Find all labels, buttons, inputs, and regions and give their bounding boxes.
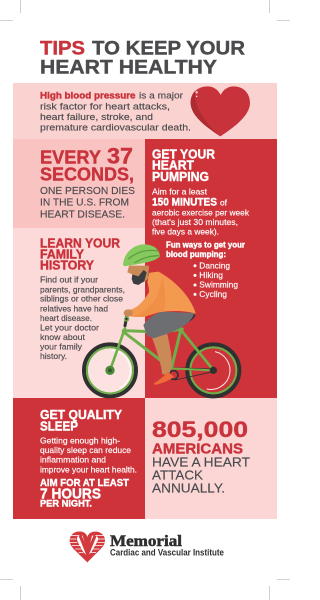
panel: get your heart pumping <box>145 139 277 398</box>
body text: inflammation and <box>40 454 106 464</box>
sleep goal <box>40 478 129 508</box>
sleep goal: 7 HOURS <box>40 486 101 502</box>
logo wordmark: Cardiac and Vascular Institute <box>110 548 224 558</box>
body text <box>40 275 125 361</box>
panel: every 37 seconds <box>13 139 145 228</box>
body text: (that's just 30 minutes, <box>152 217 238 227</box>
heading: PUMPING <box>152 170 209 184</box>
statistic text: ATTACK <box>152 467 203 482</box>
sleep goal: PER NIGHT. <box>40 498 92 508</box>
activity list: Hiking <box>199 270 223 280</box>
activity list: Dancing <box>199 260 230 270</box>
beard <box>132 270 147 285</box>
body text: history. <box>40 351 67 361</box>
panel: 805,000 americans <box>145 398 277 519</box>
statistic text: HAVE A HEART <box>152 455 250 470</box>
statistic text <box>152 417 250 496</box>
heading: HEART <box>152 159 194 173</box>
heading: GET YOUR <box>152 147 215 161</box>
title: HEART HEALTHY <box>40 56 217 78</box>
body text: Find out if your <box>40 275 98 285</box>
title: TO KEEP YOUR <box>92 38 245 60</box>
body text <box>40 436 137 474</box>
statistic text: AMERICANS <box>152 441 243 457</box>
intro text: is a major <box>139 91 183 101</box>
activity list: Swimming <box>199 280 238 290</box>
body text: relatives have had <box>40 303 108 313</box>
heading: SLEEP <box>40 419 78 433</box>
face <box>127 266 149 282</box>
statistic text: EVERY <box>40 147 101 167</box>
body text: five days a week). <box>152 227 219 237</box>
logo wordmark <box>110 533 224 558</box>
drivetrain <box>169 368 213 380</box>
intro text: risk factor for heart attacks, <box>40 101 170 111</box>
statistic text: 805,000 <box>152 417 248 442</box>
heading: GET QUALITY <box>40 408 123 422</box>
heading <box>40 408 123 433</box>
heading: LEARN YOUR <box>40 236 120 250</box>
hubs <box>105 366 217 375</box>
torso and arm <box>125 272 196 317</box>
body text: heart disease. <box>40 313 92 323</box>
helmet <box>123 244 160 266</box>
body text: of <box>220 198 228 208</box>
logo icon: striped heart <box>69 531 105 562</box>
heading <box>40 236 120 272</box>
body text: your family <box>40 341 83 351</box>
body text: 150 MINUTES <box>152 197 217 209</box>
intro text <box>40 91 191 132</box>
activity list <box>194 260 238 299</box>
saddle <box>178 312 196 326</box>
logo wordmark: Memorial <box>110 533 183 550</box>
fun ways heading <box>166 239 246 259</box>
body text: siblings or other close <box>40 294 123 304</box>
body text <box>152 186 250 237</box>
body text: Aim for a least <box>152 186 208 196</box>
body text: parents, grandparents, <box>40 284 125 294</box>
statistic text: 37 <box>107 143 133 168</box>
panel: high blood pressure <box>13 83 277 139</box>
body text: know about <box>40 332 86 342</box>
helmet stripes <box>128 250 159 263</box>
title: TIPS <box>40 38 85 60</box>
fun ways heading: Fun ways to get your <box>166 239 246 249</box>
title <box>40 38 245 78</box>
statistic text: ANNUALLY. <box>152 481 225 496</box>
panel: learn your family history <box>13 228 145 398</box>
hand <box>124 309 133 317</box>
fun ways heading: blood pumping: <box>166 249 226 259</box>
strap <box>143 268 149 288</box>
intro text: heart failure, stroke, and <box>40 112 153 122</box>
shoe <box>154 372 174 385</box>
heading <box>152 147 215 184</box>
body text: quality sleep can reduce <box>40 445 131 455</box>
statistic text: IN THE U.S. FROM <box>40 197 129 209</box>
illustration: cyclist <box>84 244 239 396</box>
panel: get quality sleep <box>13 398 145 519</box>
handlebar <box>125 312 129 326</box>
bike frame <box>110 328 213 370</box>
front wheel <box>84 344 136 396</box>
shorts <box>143 312 194 338</box>
intro text: premature cardiovascular death. <box>40 122 191 132</box>
shirt shadow <box>132 277 165 317</box>
sleep goal: AIM FOR AT LEAST <box>40 478 129 489</box>
body text: aerobic exercise per week <box>152 207 250 217</box>
rear wheel <box>187 344 239 396</box>
heading: HISTORY <box>40 258 95 272</box>
heading: FAMILY <box>40 247 85 261</box>
body text: improve your heart health. <box>40 464 137 474</box>
leg <box>152 332 172 374</box>
statistic text <box>40 143 135 221</box>
body text: Getting enough high- <box>40 436 120 446</box>
statistic text: HEART DISEASE. <box>40 209 125 221</box>
statistic text: ONE PERSON DIES <box>40 185 135 197</box>
statistic text: SECONDS, <box>40 165 134 185</box>
icon: heart <box>191 86 250 136</box>
logo <box>69 531 224 562</box>
body text: Let your doctor <box>40 322 99 332</box>
activity list: Cycling <box>199 289 227 299</box>
intro text: High blood pressure <box>40 91 136 101</box>
